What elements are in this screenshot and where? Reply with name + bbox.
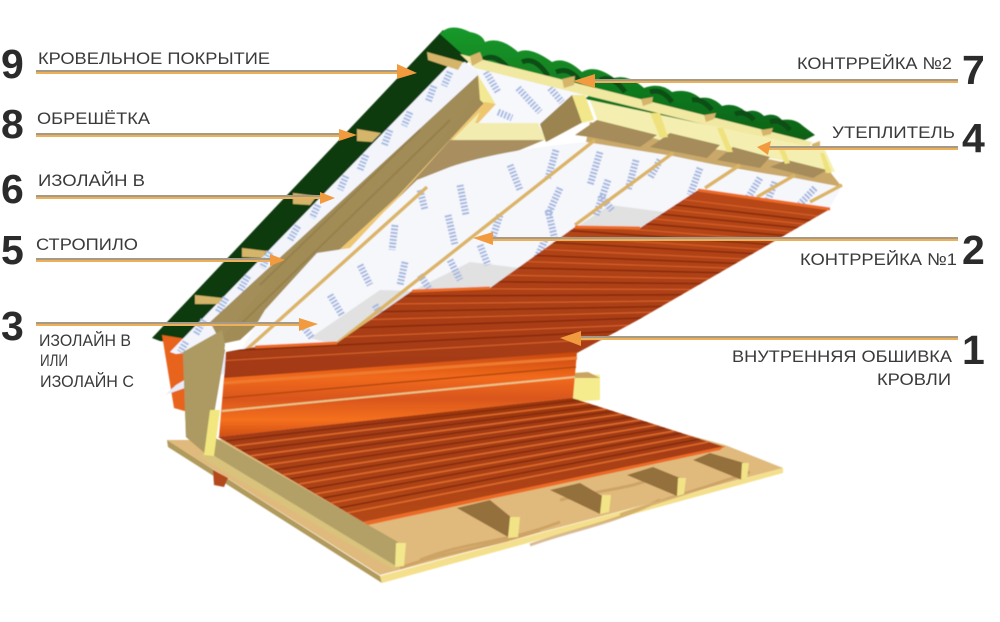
label 1: КРОВЛИ: [877, 370, 951, 389]
label 2: 2: [962, 227, 985, 273]
label 4: УТЕПЛИТЕЛЬ: [832, 123, 955, 142]
label 5: [1, 227, 138, 273]
label 9: [1, 41, 270, 87]
illustration: roof cross-section: [152, 27, 850, 583]
knee wall lining: [219, 352, 577, 437]
label 4: 4: [962, 115, 985, 161]
leader 7 with arrow: [573, 74, 958, 88]
plywood floor deck: [167, 400, 783, 583]
floor joists: [457, 453, 749, 538]
inner sloped lining: [223, 188, 831, 379]
label 8: ОБРЕШЁТКА: [37, 109, 151, 128]
green roof covering: [152, 27, 815, 345]
counter-battens: [226, 140, 842, 368]
label 3: ИЗОЛАЙН В: [39, 331, 131, 350]
leader 4 with arrow: [757, 141, 958, 155]
roof batten ridge strip: [460, 54, 812, 150]
label 6: [1, 166, 145, 212]
label 8: [1, 101, 151, 147]
label 6: 6: [1, 166, 24, 212]
left membrane band: [165, 62, 480, 395]
leader 5 with arrow: [36, 254, 285, 266]
long floor beam: [198, 436, 406, 570]
label 6: ИЗОЛАЙН В: [38, 171, 145, 190]
label 9: 9: [1, 41, 24, 87]
label 3: ИЗОЛАЙН С: [40, 372, 134, 391]
label 5: СТРОПИЛО: [36, 235, 138, 254]
label 4: [832, 115, 985, 161]
small roof battens: [195, 52, 820, 304]
label 3: ИЛИ: [40, 351, 68, 370]
label 8: 8: [1, 101, 24, 147]
leader 9 with arrow: [36, 64, 417, 79]
label 7: 7: [962, 47, 985, 93]
floor lining: [218, 398, 725, 525]
orange fascia: [162, 335, 228, 487]
label 5: 5: [1, 227, 24, 273]
label 2: [800, 227, 985, 273]
label 3: [1, 303, 134, 391]
leader 1 with arrow: [560, 331, 958, 346]
label 2: КОНТРРЕЙКА №1: [800, 250, 957, 269]
leader 8 with arrow: [36, 129, 357, 141]
label 1: ВНУТРЕННЯЯ ОБШИВКА: [732, 347, 953, 366]
label 7: КОНТРРЕЙКА №2: [797, 54, 952, 73]
leader 6 with arrow: [36, 192, 335, 204]
upper bay membrane: [470, 62, 590, 125]
insulation between rafters: [398, 95, 842, 198]
label 7: [797, 47, 985, 93]
leader 2 with arrow: [473, 232, 958, 245]
label 1: 1: [962, 327, 985, 373]
label 1: [732, 327, 985, 389]
ridge wall batten: [572, 372, 600, 402]
main rafter: [183, 75, 496, 456]
label 9: КРОВЕЛЬНОЕ ПОКРЫТИЕ: [38, 49, 270, 68]
leader 3 with arrow: [36, 318, 318, 331]
white membrane between counter-battens: [240, 142, 842, 352]
label 3: 3: [1, 303, 24, 349]
